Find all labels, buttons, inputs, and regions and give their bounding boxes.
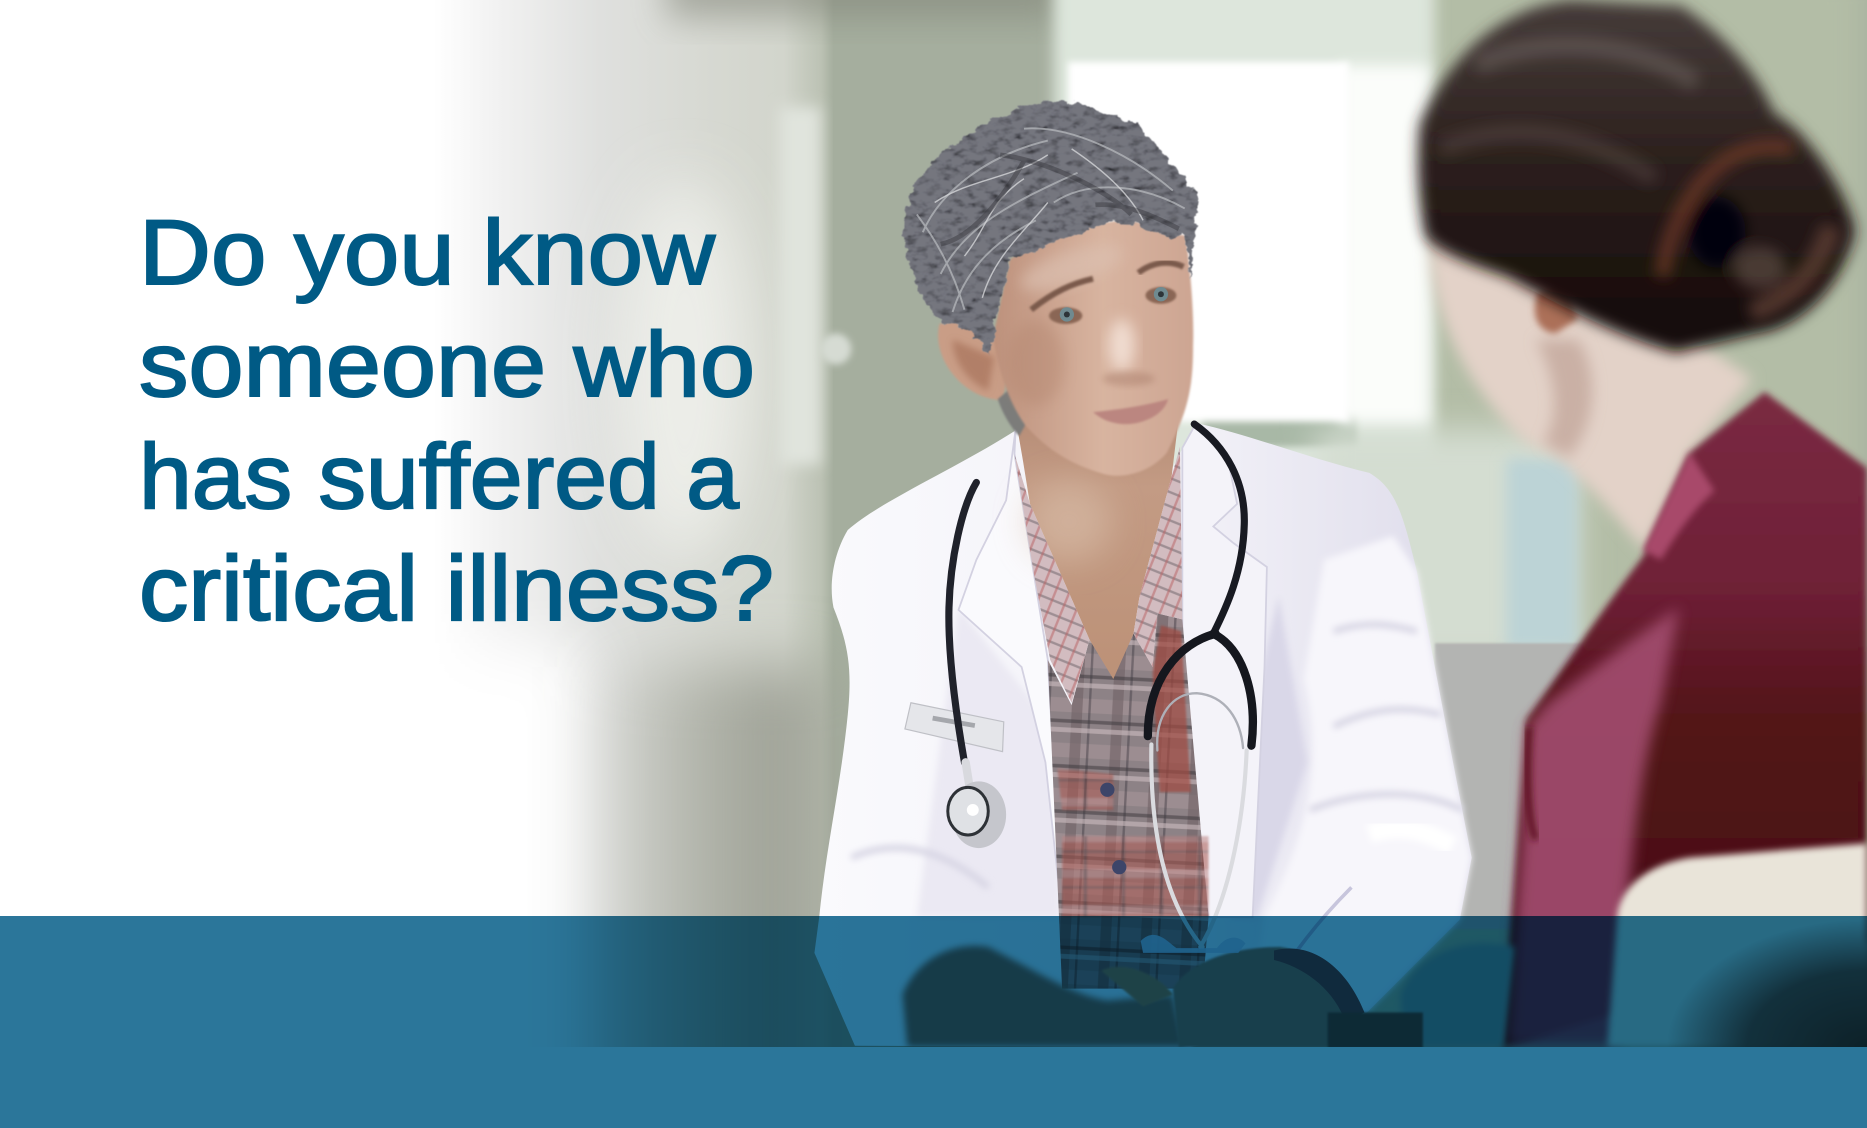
- doctor: hair: [904, 100, 1198, 355]
- doctor: cheek and forehead highlights: [1016, 236, 1128, 300]
- doctor: ear: [938, 316, 1012, 400]
- doctor: hair behind ear: [998, 387, 1030, 436]
- bright reflection behind the text: [619, 179, 750, 560]
- hands and cuffs (under the tinted band): [903, 935, 1515, 1048]
- title line 4: critical illness?: [139, 538, 774, 640]
- doctor: stethoscope: [948, 424, 1253, 947]
- doctor: neck and chest: [1013, 405, 1179, 679]
- doctor: [814, 100, 1472, 1047]
- lower darkening of the fade: [583, 667, 829, 1128]
- woman: burgundy top: [1503, 392, 1867, 1047]
- doctor: eyes: [1049, 307, 1082, 324]
- solid teal footer band: [0, 1047, 1867, 1128]
- woman seen from behind: [1418, 0, 1867, 1047]
- doctor: stethoscope chest piece: [948, 781, 1006, 848]
- woman: neck and face: [1429, 226, 1753, 550]
- doctor: head: [904, 100, 1198, 476]
- doctor: left lapel: [959, 429, 1062, 917]
- title line 3: has suffered a: [139, 426, 740, 528]
- doctor: right lapel: [1182, 426, 1267, 917]
- armchair in the foreground: [1607, 843, 1867, 1047]
- woman: hair and bun: [1418, 0, 1855, 353]
- doctor: eyebrows: [1031, 279, 1093, 310]
- white-to-grey fade on the left: [0, 0, 833, 1128]
- doctor: lab coat: [814, 423, 1472, 1047]
- doctor: face: [993, 221, 1193, 476]
- title line 1: Do you know: [139, 202, 716, 304]
- doctor: name badge: [905, 703, 1004, 752]
- doctor: mouth: [1093, 399, 1168, 424]
- lower white extension of the fade: [357, 643, 583, 1128]
- doctor: shirt collar: [1014, 447, 1182, 703]
- doctor: plaid shirt: [1048, 613, 1209, 989]
- doctor: neck highlight: [1026, 481, 1112, 562]
- title line 2: someone who: [139, 314, 755, 416]
- woman: ear: [1535, 283, 1578, 334]
- translucent teal band over photo: [0, 916, 1867, 1047]
- title: [139, 202, 774, 640]
